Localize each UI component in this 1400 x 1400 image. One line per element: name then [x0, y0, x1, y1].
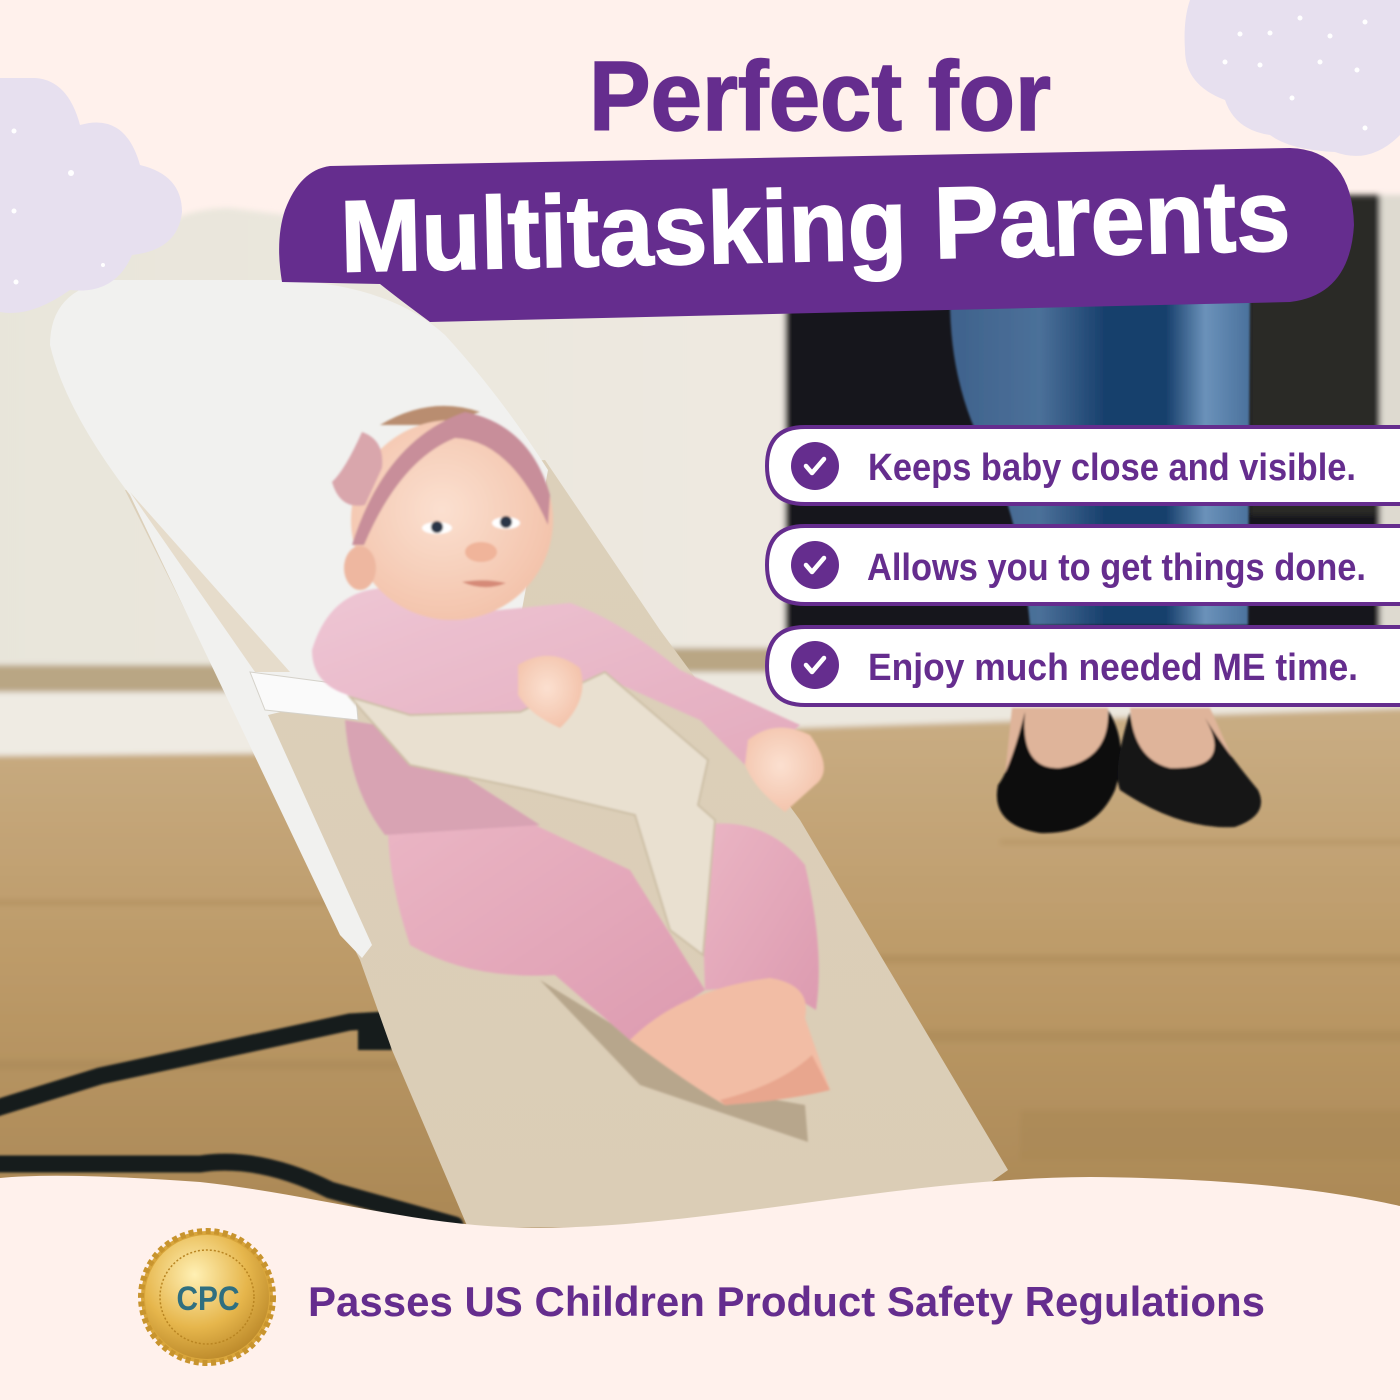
wall and cabinets — [0, 208, 800, 730]
CPC gold seal: CPC — [176, 1280, 240, 1318]
headband bow — [332, 432, 382, 506]
shoes — [997, 710, 1121, 833]
headband — [352, 412, 550, 545]
CPC gold seal — [141, 1231, 273, 1363]
icon: check — [791, 641, 839, 689]
hair — [380, 406, 480, 425]
hand left — [518, 656, 582, 728]
right wall strip — [1378, 195, 1400, 735]
jeans — [950, 300, 1250, 625]
leg shadow on seat — [540, 980, 808, 1142]
title: Perfect for: Perfect for — [589, 41, 1051, 151]
cloud: top right — [1185, 0, 1400, 156]
white mesh back and rail — [50, 280, 548, 958]
benefit pill 1 — [767, 427, 1400, 504]
harness — [350, 672, 715, 955]
benefit pill 2 — [767, 526, 1400, 604]
toes shading — [720, 1055, 830, 1105]
torso — [345, 720, 540, 835]
trousers — [388, 825, 705, 1040]
benefit pill 3 — [767, 627, 1400, 705]
heading banner — [279, 148, 1354, 322]
arms and top — [312, 588, 800, 770]
icon: check — [791, 541, 839, 589]
floor boards — [0, 840, 1400, 1160]
bottom wave — [0, 1176, 1400, 1400]
photo: bouncer seat — [50, 280, 1008, 1228]
safety statement: Passes US Children Product Safety Regulations — [308, 1278, 1265, 1325]
floor — [0, 708, 1400, 1250]
lower cabinet plinth — [0, 648, 1400, 758]
nose and mouth — [462, 542, 506, 587]
heading text: Multitasking Parents — [339, 158, 1291, 294]
photo: kitchen scene — [0, 195, 1400, 1250]
oven — [785, 195, 1380, 645]
beige fabric seat — [125, 460, 1008, 1228]
foot and ankle — [630, 978, 830, 1105]
strap clip — [250, 672, 358, 720]
ear — [344, 546, 376, 590]
cloud: top left — [0, 78, 182, 313]
head — [351, 420, 553, 620]
hand right — [745, 728, 824, 812]
photo: bouncer frame — [0, 1016, 455, 1225]
ankles — [1005, 708, 1240, 775]
icon: check — [791, 442, 839, 490]
benefit text: Enjoy much needed ME time. — [868, 647, 1358, 689]
eyes — [422, 516, 520, 534]
photo: parent's legs and shoes — [950, 300, 1261, 833]
inner seat panel — [130, 492, 290, 672]
photo: baby — [312, 406, 830, 1142]
benefit text: Keeps baby close and visible. — [868, 447, 1356, 489]
